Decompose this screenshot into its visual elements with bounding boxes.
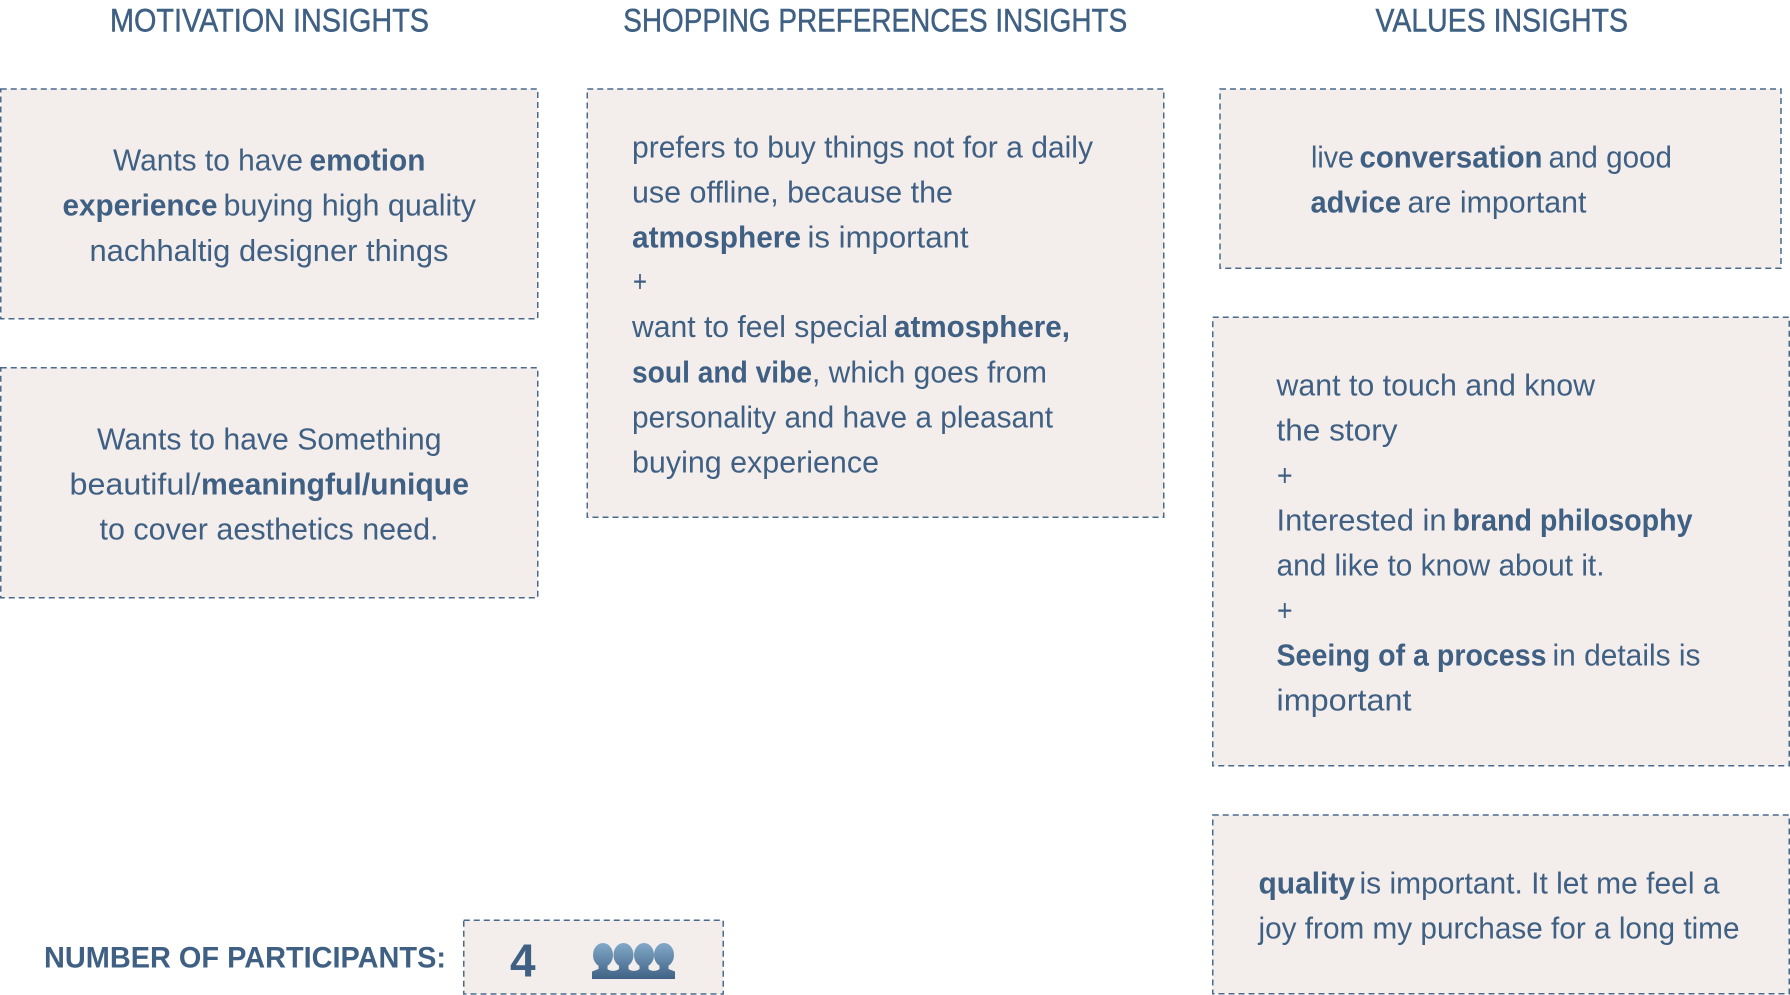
- panel: emotion experience: experience: [62, 188, 218, 222]
- panel: atmosphere: soul and vibe: [632, 354, 812, 389]
- panel: emotion experience: nachhaltig designer things: [90, 233, 448, 268]
- panel: aesthetics need: meaningful/unique: [201, 466, 469, 502]
- panel: brand philosophy: and like to know about it.: [1276, 548, 1604, 582]
- panel: atmosphere: want to feel special: [631, 309, 888, 344]
- panel: conversation and advice: are important: [1408, 184, 1587, 220]
- panel: emotion experience: [1, 89, 538, 319]
- heading: values insights: VALUES INSIGHTS: [1376, 2, 1628, 38]
- panel: conversation and advice: and good: [1548, 140, 1672, 174]
- panel: quality: is important. It let me feel a: [1360, 866, 1720, 900]
- panel: brand philosophy: +: [1277, 458, 1293, 492]
- panel: brand philosophy: Seeing of a process: [1276, 638, 1546, 672]
- column: shopping preferences insights: [587, 2, 1164, 517]
- panel: brand philosophy: brand philosophy: [1452, 502, 1693, 538]
- panel: brand philosophy: the story: [1276, 412, 1398, 448]
- label: number of participants: NUMBER OF PARTICIPANTS:: [44, 942, 446, 974]
- panel: conversation and advice: [1220, 89, 1781, 268]
- icon: four people: [592, 943, 675, 979]
- panel: aesthetics need: [1, 368, 538, 598]
- column: motivation insights: [1, 2, 538, 598]
- panel: brand philosophy: [1213, 317, 1789, 766]
- column: values insights: [1213, 2, 1789, 994]
- panel: atmosphere: [587, 89, 1164, 517]
- panel: atmosphere: use offline, because the: [632, 174, 953, 209]
- participants row: [44, 920, 723, 994]
- heading: shopping preferences insights: SHOPPING PREFERENCES INSIGHTS: [623, 2, 1127, 38]
- panel: brand philosophy: want to touch and know: [1276, 368, 1596, 402]
- number: 4: 4: [510, 934, 536, 986]
- panel: atmosphere: prefers to buy things not for a daily: [632, 129, 1093, 164]
- panel: atmosphere: atmosphere: [632, 219, 801, 254]
- panel: brand philosophy: in details is: [1552, 638, 1700, 672]
- panel: brand philosophy: important: [1276, 682, 1412, 718]
- panel: atmosphere: +: [633, 264, 647, 298]
- panel: brand philosophy: Interested in: [1276, 502, 1446, 538]
- panel: participant count: [464, 920, 723, 994]
- panel: brand philosophy: +: [1277, 592, 1293, 628]
- panel: quality: [1213, 815, 1789, 994]
- panel: emotion experience: Wants to have: [113, 142, 303, 178]
- panel: emotion experience: buying high quality: [224, 188, 476, 222]
- panel: atmosphere: atmosphere,: [894, 309, 1070, 344]
- panel: atmosphere: , which goes from: [812, 354, 1047, 389]
- panel: conversation and advice: live: [1311, 140, 1354, 174]
- panel: emotion experience: emotion: [310, 142, 426, 178]
- panel: atmosphere: buying experience: [632, 444, 879, 479]
- panel: atmosphere: personality and have a pleasant: [632, 399, 1053, 434]
- panel: aesthetics need: Wants to have Something: [97, 422, 442, 456]
- heading: motivation insights: MOTIVATION INSIGHTS: [110, 2, 429, 38]
- panel: atmosphere: is important: [808, 219, 969, 254]
- panel: quality: quality: [1258, 866, 1356, 900]
- panel: conversation and advice: conversation: [1360, 140, 1542, 174]
- panel: aesthetics need: to cover aesthetics need.: [100, 512, 438, 546]
- panel: aesthetics need: beautiful/: [70, 466, 201, 502]
- panel: quality: joy from my purchase for a long time: [1258, 910, 1740, 946]
- panel: conversation and advice: advice: [1310, 184, 1401, 220]
